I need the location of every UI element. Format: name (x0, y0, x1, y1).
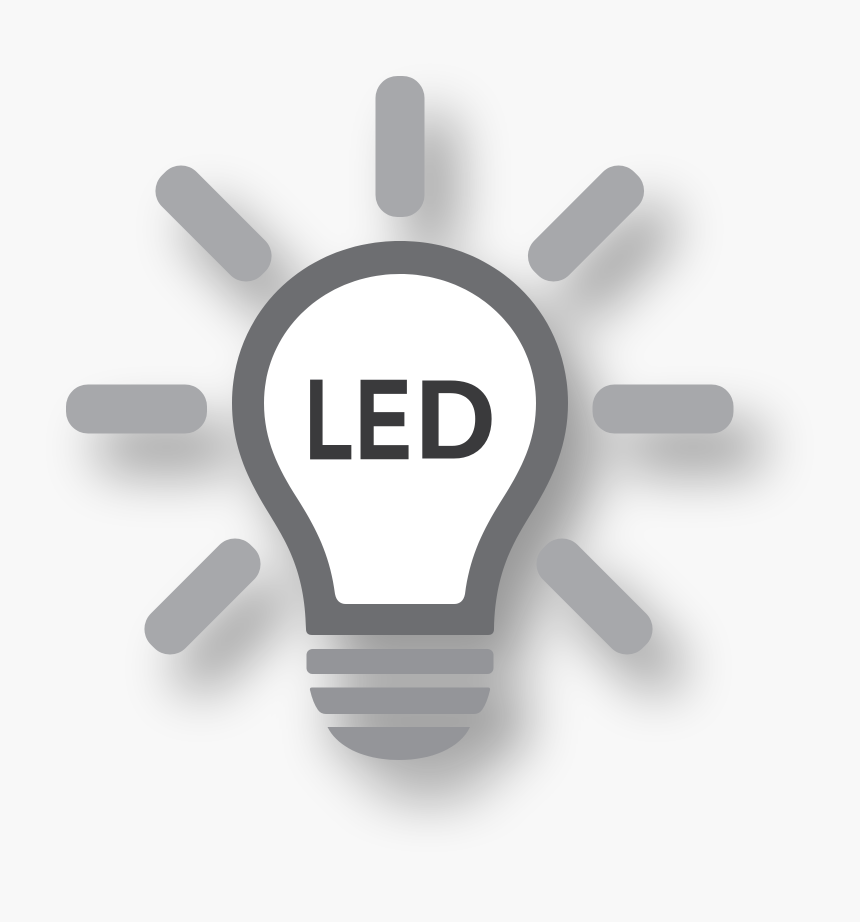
ray: upper left (146, 156, 281, 291)
ray: upper right (519, 156, 653, 291)
ray: top (376, 76, 424, 217)
base cap (328, 727, 470, 760)
ray: left (66, 384, 207, 434)
LED label (306, 356, 496, 484)
base thread 2 (310, 688, 490, 714)
LED label: D (415, 356, 496, 482)
bulb glass (232, 241, 568, 635)
ray: lower left (135, 529, 270, 664)
ray: right (592, 384, 734, 434)
LED label: E (356, 357, 411, 484)
base thread 1 (306, 649, 494, 674)
ray: lower right (527, 529, 662, 664)
drop shadow (96, 114, 764, 798)
bulb interior (264, 274, 536, 604)
light rays (66, 76, 734, 664)
bulb base (306, 649, 494, 760)
LED label: L (306, 356, 353, 483)
